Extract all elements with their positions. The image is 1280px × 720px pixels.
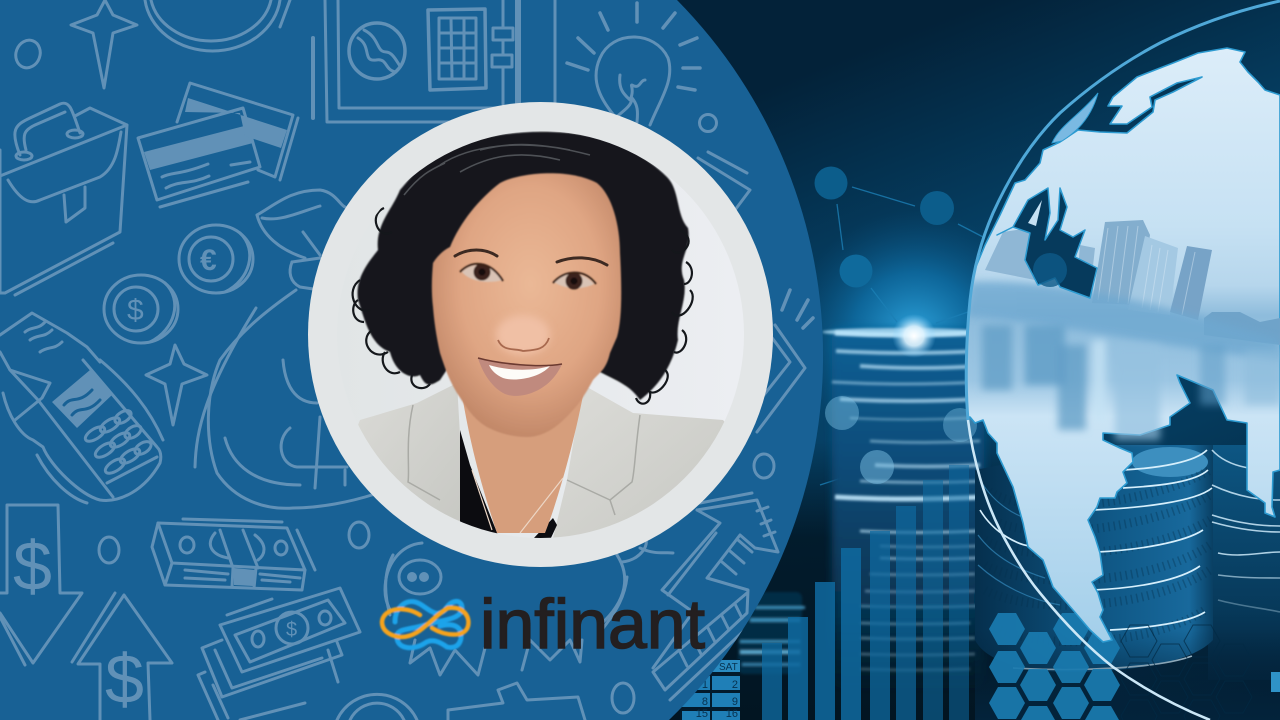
black top: [460, 430, 557, 540]
logo: infinant: [382, 585, 705, 663]
icon: growth arrow: [653, 493, 778, 700]
icon: small ring right: [700, 114, 716, 132]
icon: payment terminal: [0, 313, 163, 503]
hexagon cluster: [989, 613, 1120, 720]
coin stacks on the right: [975, 445, 1280, 680]
calendar table fragment: 8: [702, 696, 708, 708]
necklace: [472, 470, 563, 533]
calendar table fragment: 2: [732, 679, 738, 691]
Iceland highlight: [1052, 93, 1098, 143]
calendar table fragment: 16: [726, 708, 738, 720]
lens flare: [822, 314, 978, 358]
globe: [962, 48, 1280, 642]
icon: tag near photo: [698, 152, 750, 210]
icon: ring bottom: [612, 683, 634, 713]
icon: down arrow with dollar: [0, 505, 82, 665]
icon: money bag: [195, 190, 375, 508]
icon: piggy bank: [385, 538, 673, 675]
icon: credit cards: [138, 83, 298, 207]
icon: light bulb: [567, 3, 700, 125]
calendar table fragment: 9: [732, 696, 738, 708]
eyes: [460, 264, 596, 290]
icon: dollar bills: [198, 588, 360, 720]
icon: euro coin: [179, 225, 253, 293]
neck and chest: [462, 385, 585, 533]
icon: ring lower left: [99, 537, 119, 563]
small coin stack lower left: [738, 592, 805, 674]
photo frame ring: [308, 102, 773, 567]
calendar table fragment: 1: [702, 679, 708, 691]
globe rim: [966, 1, 1280, 720]
nose: [496, 315, 550, 355]
icon: up arrow with dollar: [72, 593, 172, 720]
globe light landmass with city reflection: [962, 48, 1280, 642]
icon: briefcase: [0, 103, 127, 295]
faint outlined hexagons: [1121, 625, 1252, 720]
water reflection: [982, 325, 1280, 440]
logo wordmark: infinant: [480, 585, 705, 663]
eyebrows: [455, 250, 607, 265]
calendar table fragment: 15: [696, 708, 708, 720]
dark Mediterranean cut-out: [997, 188, 1097, 298]
icon: money stack: [152, 519, 315, 590]
icon: star lower: [146, 345, 207, 425]
hair: [353, 132, 693, 404]
icon: diamond: [757, 290, 813, 432]
lapel lines: [408, 405, 640, 515]
logo mark: infinity knot: [382, 601, 468, 648]
city skyline: [966, 220, 1280, 360]
icon: folder bottom: [448, 683, 585, 720]
icon: ring right lower: [754, 454, 774, 478]
calendar table fragment: [680, 659, 740, 720]
icon: ring top left: [14, 38, 42, 70]
jacket left: [358, 385, 460, 522]
portrait photo: [337, 131, 744, 540]
jacket right: [553, 388, 724, 538]
icon: dollar coin: [104, 275, 178, 343]
icon: euro coin: €: [200, 244, 217, 277]
icon: dollar coin: $: [127, 294, 144, 327]
bar chart: [762, 465, 969, 720]
small square accent: [1271, 672, 1280, 692]
icon: dollar bills: $: [286, 619, 297, 641]
background: dark navy finance scene: [640, 0, 1280, 720]
calendar table fragment: SAT: [719, 662, 738, 673]
icon: sparkle star: [71, 0, 137, 88]
face: [432, 173, 621, 437]
icon: target bottom: [337, 694, 417, 720]
icon: down arrow with dollar: $: [13, 527, 52, 605]
icon: safe: [313, 0, 555, 122]
mouth: [478, 358, 562, 396]
coin stack behind bar chart: [825, 328, 985, 688]
light glow behind coins: [790, 210, 1040, 460]
icon: up arrow with dollar: $: [105, 640, 144, 718]
icon: clock: [145, 0, 290, 51]
lower dark backdrop: [660, 440, 1000, 720]
network nodes and links: [814, 166, 985, 485]
stack fade to dark: [975, 630, 1280, 720]
icon: ring by piggy: [349, 522, 369, 548]
blue semicircle panel with doodles: [0, 0, 823, 720]
